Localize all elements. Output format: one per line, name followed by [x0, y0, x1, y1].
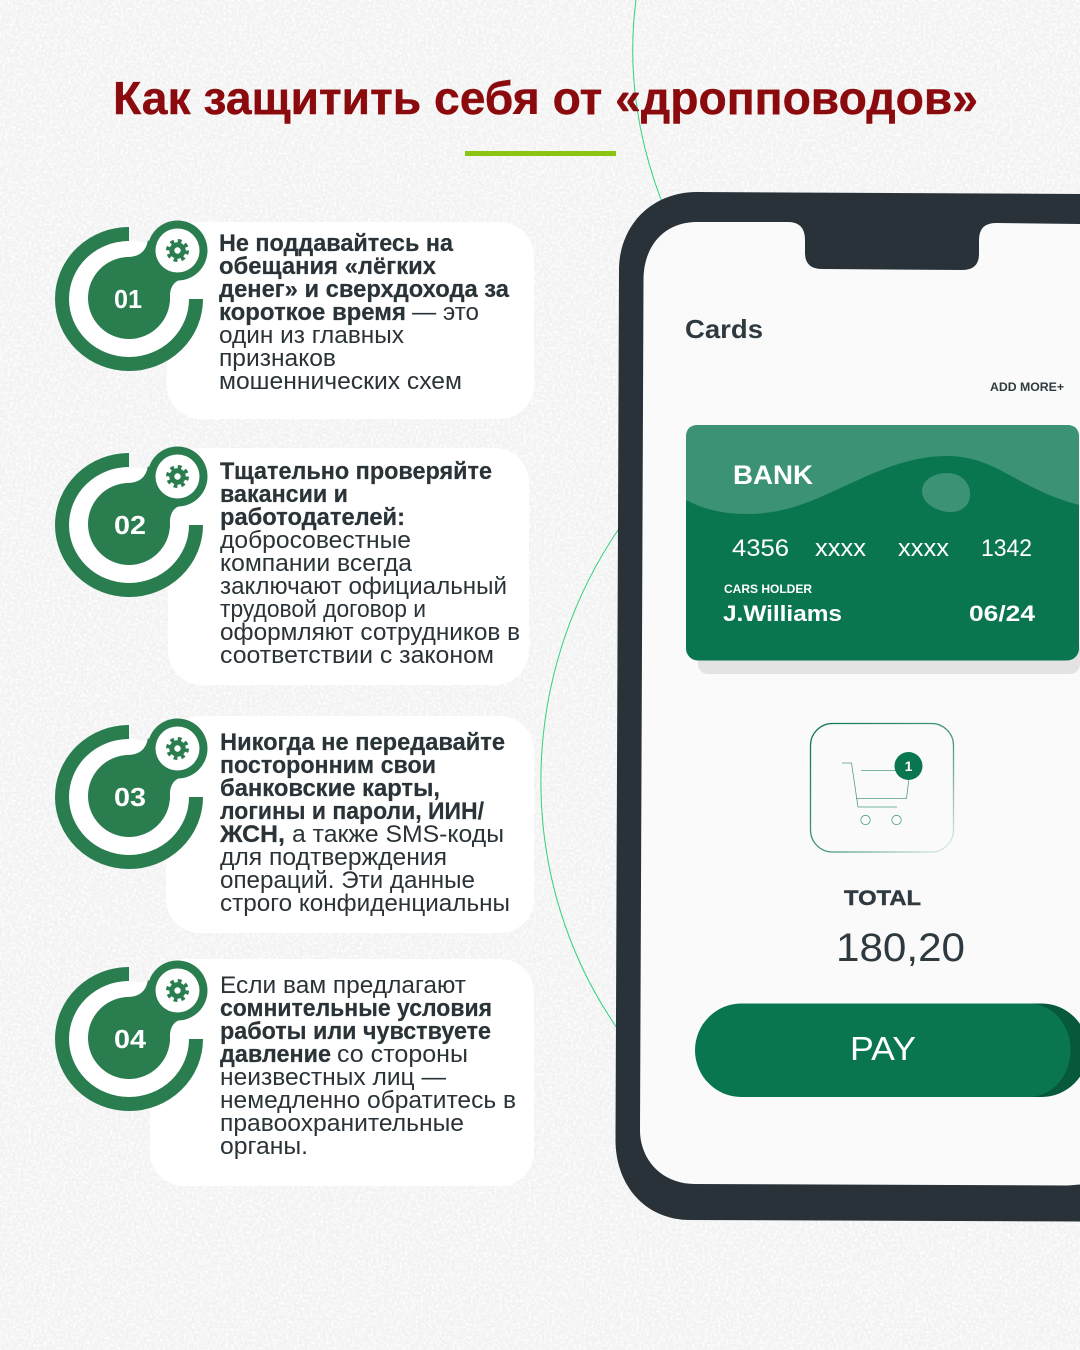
- text block 04: давление: [220, 1041, 331, 1068]
- badge 01: 01: [114, 284, 142, 314]
- text block 01: короткое время: [219, 299, 406, 326]
- badge 03: [62, 718, 208, 862]
- panel: step 04: [62, 959, 534, 1186]
- text block 04: неизвестных лиц —: [220, 1064, 446, 1091]
- pay button: PAY: [850, 1030, 916, 1067]
- card texts: xxxx: [898, 535, 949, 562]
- text block 02: оформляют сотрудников в: [220, 619, 520, 646]
- cart tile: 1: [905, 758, 913, 774]
- text block 02: компании всегда: [220, 550, 413, 577]
- text block 04: со стороны: [337, 1041, 468, 1068]
- text block 03: строго конфиденциальны: [220, 890, 510, 917]
- title: Как защитить себя от «дропповодов»: [113, 72, 978, 124]
- text block 04: работы или чувствуете: [220, 1018, 491, 1045]
- card background 01: [167, 222, 534, 419]
- text block 03: операций. Эти данные: [220, 867, 475, 894]
- card texts: J.Williams: [723, 601, 842, 626]
- card texts: [723, 460, 1036, 626]
- text block 03: для подтверждения: [220, 844, 447, 871]
- badge 04: 04: [114, 1024, 147, 1054]
- card texts: 4356: [732, 535, 789, 562]
- text block 02: заключают официальный: [220, 573, 507, 600]
- card texts: CARS HOLDER: [724, 584, 813, 596]
- text block 02: трудовой договор и: [220, 596, 426, 623]
- text block 03: [219, 729, 510, 917]
- card texts: 06/24: [969, 601, 1036, 626]
- text block 02: работодателей:: [220, 504, 405, 531]
- text block 02: добросовестные: [220, 527, 411, 554]
- badge 04: [62, 960, 208, 1104]
- card texts: 1342: [981, 535, 1032, 562]
- text block 03: логины и пароли, ИИН/: [220, 798, 484, 825]
- card wave: [686, 425, 1079, 514]
- text block 01: мошеннических схем: [219, 368, 462, 395]
- heading: Cards: Cards: [685, 314, 763, 344]
- link: add more: ADD MORE+: [990, 382, 1064, 394]
- panel: step 01: [62, 220, 534, 419]
- text block 04: [220, 972, 516, 1160]
- badge 03: 03: [114, 782, 146, 812]
- decorative green curve: middle: [541, 527, 620, 1028]
- decorative green curve: top: [633, 0, 662, 202]
- text block 01: [219, 230, 510, 395]
- icon: shopping cart: [842, 763, 910, 825]
- badge 01: [62, 220, 208, 364]
- total amount: 180,20: [836, 926, 965, 970]
- card background 02: [168, 448, 529, 685]
- card base: [686, 425, 1079, 660]
- total label: TOTAL: [844, 887, 921, 910]
- text block 01: — это: [412, 299, 479, 326]
- text block 01: один из главных: [219, 322, 404, 349]
- badge 02: 02: [114, 510, 146, 540]
- card texts: xxxx: [815, 535, 866, 562]
- text block 03: Никогда не передавайте: [220, 729, 505, 756]
- badge 02: [62, 446, 208, 590]
- pay button: [695, 1004, 1080, 1097]
- bank card: [686, 425, 1079, 660]
- text block 04: правоохранительные: [220, 1110, 464, 1137]
- text block 01: денег» и сверхдохода за: [219, 276, 510, 303]
- text block 04: сомнительные условия: [220, 995, 492, 1022]
- card texts: BANK: [733, 460, 814, 490]
- text block 03: посторонним свои: [220, 752, 436, 779]
- text block 03: а также SMS-коды: [292, 821, 504, 848]
- panel: step 02: [62, 446, 529, 685]
- title underline: [465, 151, 616, 156]
- card shadow: [698, 640, 1080, 674]
- phone mockup: [616, 192, 1080, 1222]
- text block 03: ЖСН,: [219, 821, 285, 848]
- text block 04: органы.: [220, 1133, 308, 1160]
- text block 01: обещания «лёгких: [219, 253, 437, 280]
- card blob: [922, 473, 970, 512]
- panel: step 03: [62, 716, 534, 933]
- text block 01: Не поддавайтесь на: [219, 230, 454, 257]
- phone body: [616, 192, 1080, 1222]
- text block 03: банковские карты,: [220, 775, 440, 802]
- card background 04: [150, 959, 534, 1186]
- text block 02: соответствии с законом: [220, 642, 494, 669]
- text block 01: признаков: [219, 345, 336, 372]
- cart tile: [810, 724, 954, 852]
- phone screen: [640, 222, 1080, 1186]
- text block 04: немедленно обратитесь в: [220, 1087, 516, 1114]
- text block 04: Если вам предлагают: [220, 972, 466, 999]
- cart count badge: [894, 752, 922, 780]
- card background 03: [166, 716, 534, 933]
- text block 02: вакансии и: [220, 481, 348, 508]
- text block 02: Тщательно проверяйте: [220, 458, 492, 485]
- text block 02: [220, 458, 520, 669]
